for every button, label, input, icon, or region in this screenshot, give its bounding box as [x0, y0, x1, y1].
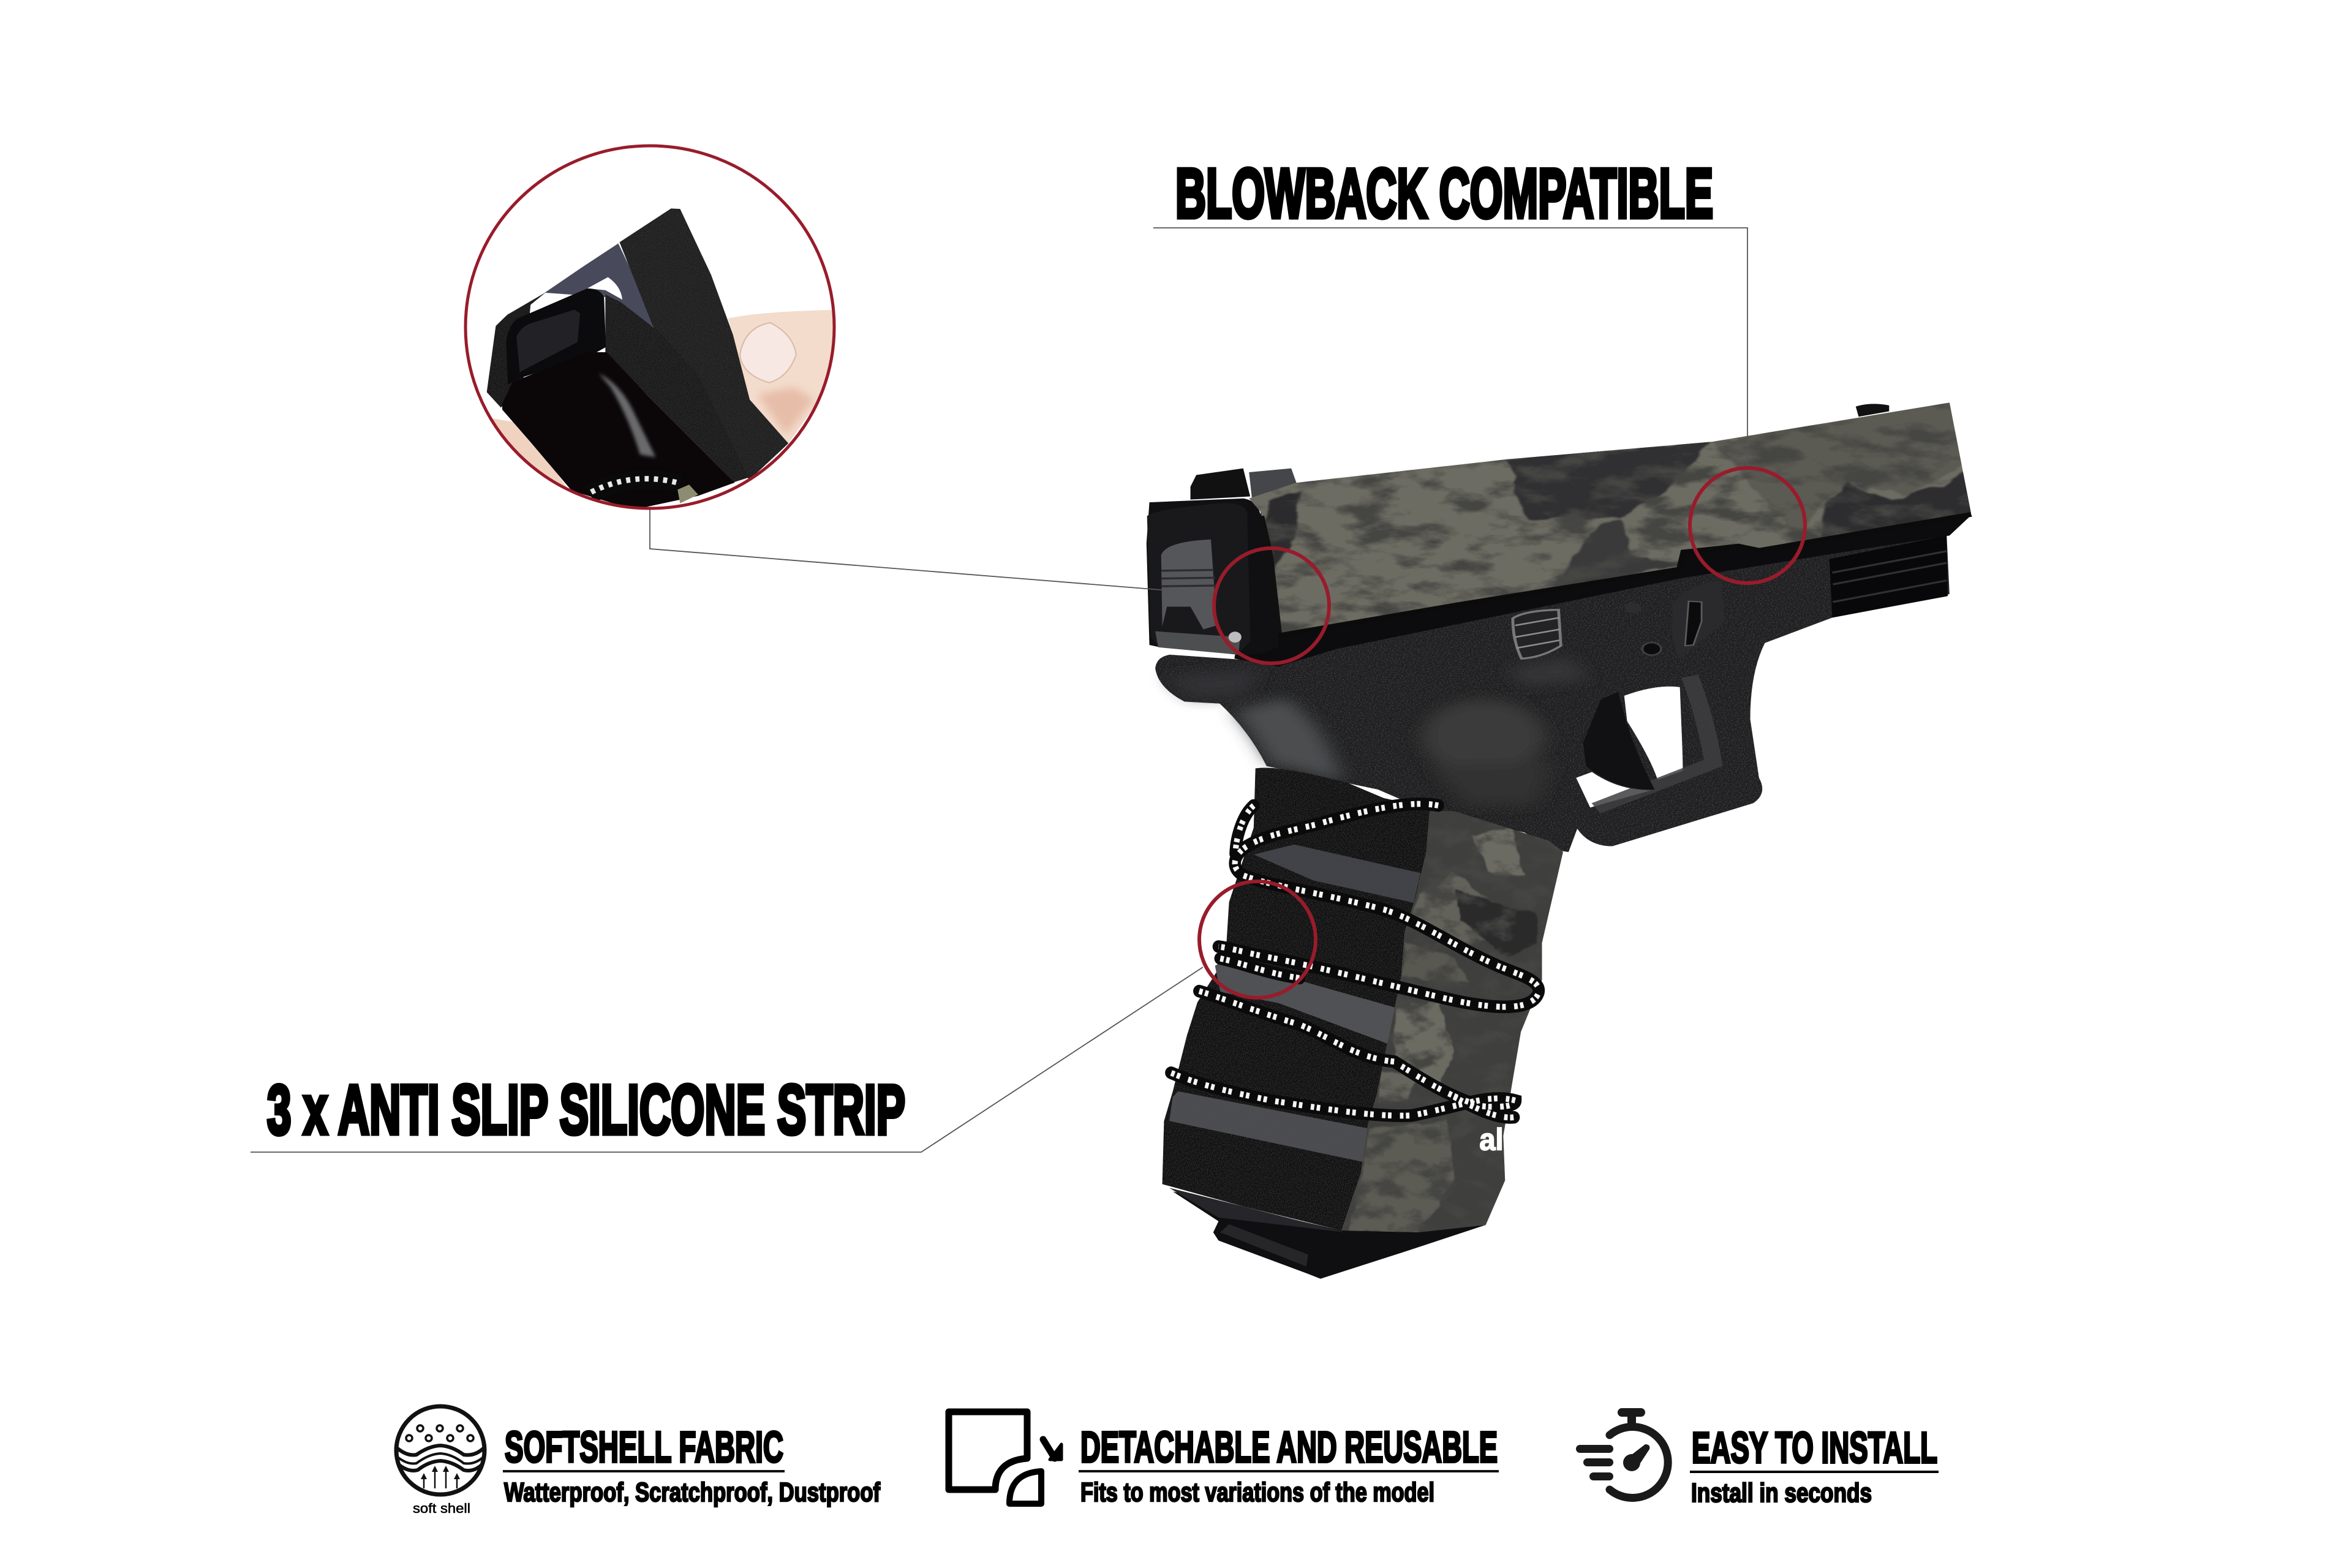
photo: pistol with camouflage wrap — [1147, 401, 1976, 1279]
front sight — [1856, 404, 1889, 417]
camouflage fabric on grip — [1341, 811, 1563, 1232]
camouflage fabric on slide — [1249, 401, 1976, 635]
thumb shading — [758, 387, 814, 435]
thumb nail — [740, 323, 796, 383]
velcro edge — [1278, 514, 1971, 636]
feature rule — [1690, 1471, 1939, 1473]
feature: detachable and reusable — [949, 1412, 1499, 1507]
slide cover ribs — [1161, 540, 1217, 629]
feature: softshell fabric — [396, 1406, 880, 1516]
magazine base — [1173, 1191, 1486, 1279]
pistol slide and frame — [1147, 401, 1976, 852]
printed logo on grip: al — [1479, 1123, 1504, 1157]
lower finger — [492, 418, 567, 488]
gun frame — [502, 352, 735, 510]
velcro strap — [619, 208, 788, 480]
detail photo content — [479, 208, 845, 510]
velcro on slide — [605, 295, 748, 482]
takedown lever — [1513, 610, 1561, 658]
feature title: SOFTSHELL FABRIC — [505, 1423, 783, 1472]
frame pins — [1625, 602, 1641, 613]
frame highlights — [1167, 657, 1589, 805]
khaki fabric in detail — [677, 484, 698, 503]
trigger — [1583, 692, 1654, 790]
rear cover plate — [1147, 503, 1250, 655]
icon: detachable corner — [949, 1412, 1061, 1504]
grip lower frame — [1169, 1188, 1345, 1232]
grip camouflage patches — [1349, 828, 1539, 1232]
feature description: Fits to most variations of the model — [1080, 1477, 1434, 1507]
hole in strap — [587, 277, 622, 300]
frame highlight — [599, 374, 655, 457]
feature description: Install in seconds — [1691, 1478, 1872, 1508]
red highlight circle: slide rear — [1214, 548, 1329, 663]
icon caption: soft shell — [413, 1501, 470, 1516]
gun rear face — [506, 288, 606, 385]
feature rule — [503, 1470, 785, 1472]
feature: easy to install — [1576, 1408, 1939, 1508]
heading: blowback compatible: BLOWBACK COMPATIBLE — [1175, 155, 1713, 233]
feature description: Watterproof, Scratchproof, Dustproof — [504, 1477, 880, 1507]
rear plate — [516, 310, 580, 372]
leader line: detail circle — [650, 510, 1214, 594]
leader line: blowback compatible — [1153, 228, 1747, 469]
infographic canvas — [251, 145, 1972, 1513]
frame body — [1155, 533, 1950, 852]
thumb — [728, 310, 833, 443]
fleece back of strap — [545, 244, 654, 327]
trigger guard opening — [1576, 687, 1683, 807]
slide black base — [1234, 484, 1971, 666]
grip wrap — [1163, 768, 1563, 1279]
slide stop — [1672, 581, 1725, 658]
red highlight circle: grip — [1199, 881, 1316, 998]
anti slip silicone strips — [1169, 845, 1420, 1162]
black bungee cord — [1171, 804, 1539, 1117]
slide camouflage patches — [1267, 401, 1976, 590]
detail circle outline — [466, 146, 834, 508]
black stretch fabric — [1163, 768, 1434, 1231]
red highlight circle: slide edge — [1690, 468, 1805, 583]
leader line: anti slip strip — [251, 967, 1203, 1152]
heading: anti slip silicone strip: 3 x ANTI SLIP SILICONE STRIP — [267, 1071, 905, 1149]
cord in detail — [590, 480, 680, 495]
magazine base recess — [1220, 1224, 1308, 1267]
rear sight and serrations — [1191, 469, 1250, 500]
detail photo circle: velcro attachment — [466, 146, 845, 510]
feature title: DETACHABLE AND REUSABLE — [1080, 1423, 1498, 1472]
frame rear rail — [1155, 631, 1240, 655]
feature title: EASY TO INSTALL — [1692, 1424, 1937, 1472]
trigger guard shading — [1596, 676, 1713, 809]
slide rear face — [1147, 499, 1278, 655]
icon: softshell — [396, 1406, 484, 1494]
icon: stopwatch — [1576, 1408, 1668, 1498]
recoil assembly — [1830, 535, 1948, 617]
folded velcro left — [487, 292, 546, 408]
feature rule — [1079, 1470, 1499, 1472]
